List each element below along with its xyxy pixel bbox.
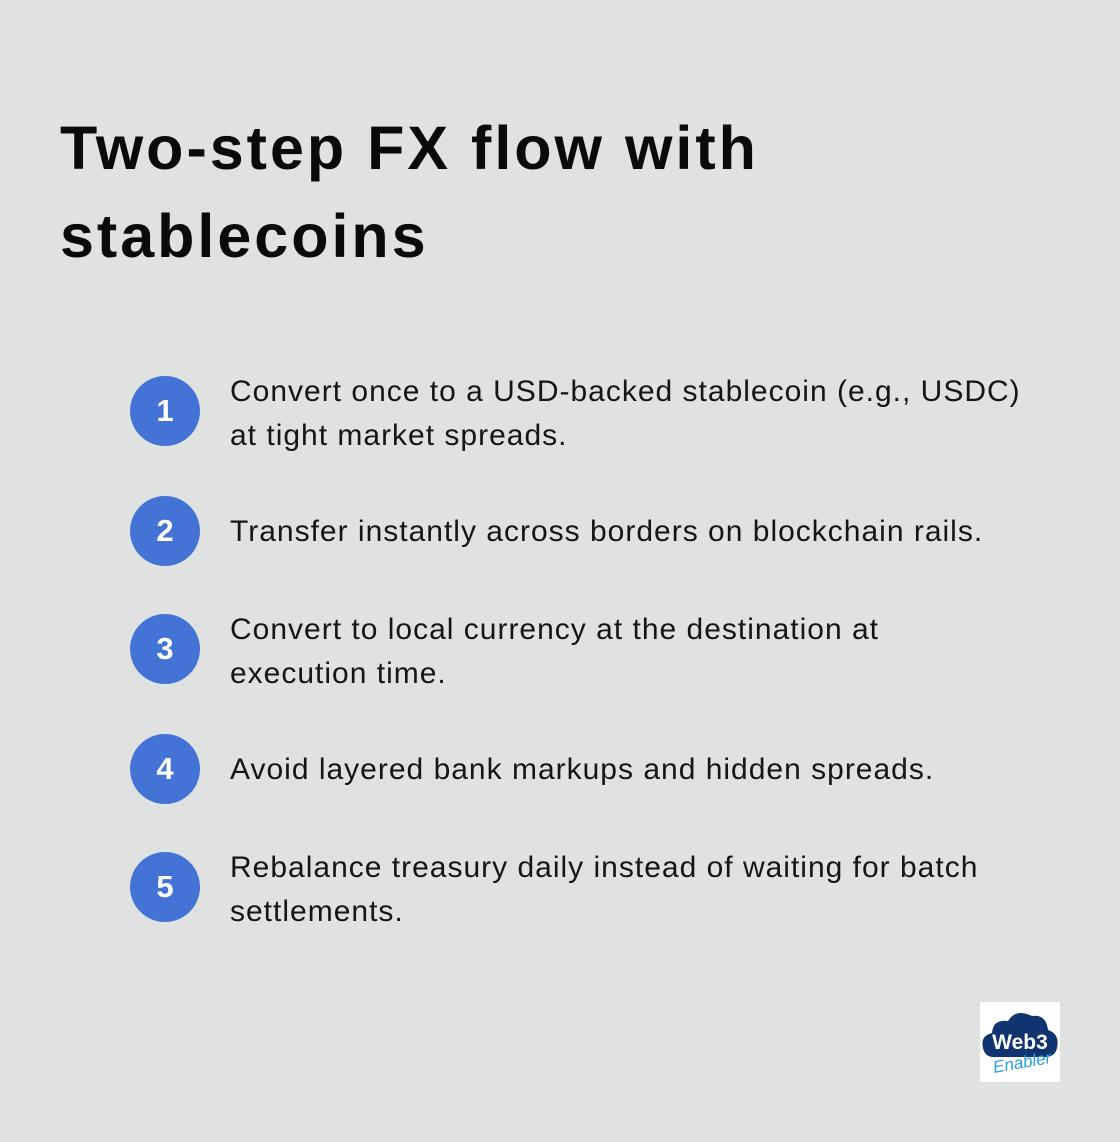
step 1: Convert once to a USD-backed stablecoin (e.g., USDC): [230, 375, 1021, 408]
step 5: Rebalance treasury daily instead of waiting for batch: [230, 851, 978, 884]
step 2: 2: [156, 513, 174, 548]
logo: Web3: [992, 1031, 1048, 1054]
step 1: 1: [156, 393, 174, 428]
step 5: settlements.: [230, 895, 404, 928]
step 3: Convert to local currency at the destination at: [230, 613, 879, 646]
step 3: execution time.: [230, 657, 447, 690]
step 5: 5: [156, 869, 174, 904]
step 1: [130, 375, 1021, 452]
step 3: [130, 613, 879, 690]
step 4: Avoid layered bank markups and hidden spreads.: [230, 753, 934, 786]
step 4: 4: [156, 751, 174, 786]
logo: Enabler: [992, 1048, 1054, 1077]
title: stablecoins: [60, 202, 429, 270]
title: [60, 114, 759, 270]
step 1: at tight market spreads.: [230, 419, 567, 452]
step 2: [130, 496, 983, 566]
step 5: [130, 851, 978, 928]
step 3: 3: [156, 631, 174, 666]
step 2: Transfer instantly across borders on blockchain rails.: [230, 515, 983, 548]
title: Two-step FX flow with: [60, 114, 759, 182]
step 4: [130, 734, 934, 804]
logo: [980, 1002, 1060, 1082]
